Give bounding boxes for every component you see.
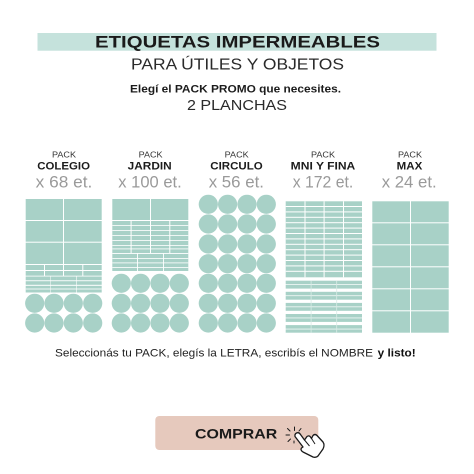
- label: pack jardin: x 100 et.: [118, 173, 182, 192]
- label: pack max: x 24 et.: [382, 173, 437, 192]
- instructions: Seleccionás tu PACK, elegís la LETRA, escribís el NOMBRE: [55, 348, 373, 360]
- label: pack mni y fina: PACK: [311, 151, 336, 160]
- title: ETIQUETAS IMPERMEABLES: [95, 32, 380, 51]
- label: pack max: MAX: [397, 161, 423, 173]
- sheet: jardin: [112, 199, 189, 333]
- sheet: max: [372, 201, 449, 333]
- label: pack circulo: CIRCULO: [210, 161, 263, 173]
- label: pack circulo: PACK: [225, 151, 249, 160]
- promo heading: Elegí el PACK PROMO que necesites.: [130, 83, 341, 95]
- label: pack colegio: COLEGIO: [37, 161, 90, 173]
- label: pack max: [382, 151, 437, 192]
- label: pack circulo: x 56 et.: [209, 173, 264, 192]
- label: pack colegio: PACK: [52, 151, 77, 160]
- button: comprar: [155, 416, 318, 450]
- label: pack colegio: [36, 151, 92, 192]
- sheet: circulo: [199, 195, 276, 333]
- label: pack jardin: [118, 151, 182, 192]
- sheet: mni y fina: [286, 201, 362, 333]
- instructions: y listo!: [378, 348, 416, 360]
- sheet: colegio: [25, 199, 102, 333]
- icon: clicking hand: [286, 427, 324, 457]
- label: pack mni y fina: x 172 et.: [293, 173, 353, 192]
- label: pack mni y fina: [291, 151, 355, 192]
- title: [38, 32, 436, 51]
- button: comprar: COMPRAR: [195, 425, 277, 441]
- label: pack mni y fina: MNI Y FINA: [291, 161, 355, 173]
- planchas count: 2 PLANCHAS: [187, 98, 287, 114]
- label: pack circulo: [209, 151, 264, 192]
- label: pack jardin: PACK: [139, 151, 163, 160]
- label: pack colegio: x 68 et.: [36, 173, 92, 192]
- label: pack max: PACK: [398, 151, 423, 160]
- label: pack jardin: JARDIN: [128, 161, 172, 173]
- subtitle: PARA ÚTILES Y OBJETOS: [131, 54, 344, 73]
